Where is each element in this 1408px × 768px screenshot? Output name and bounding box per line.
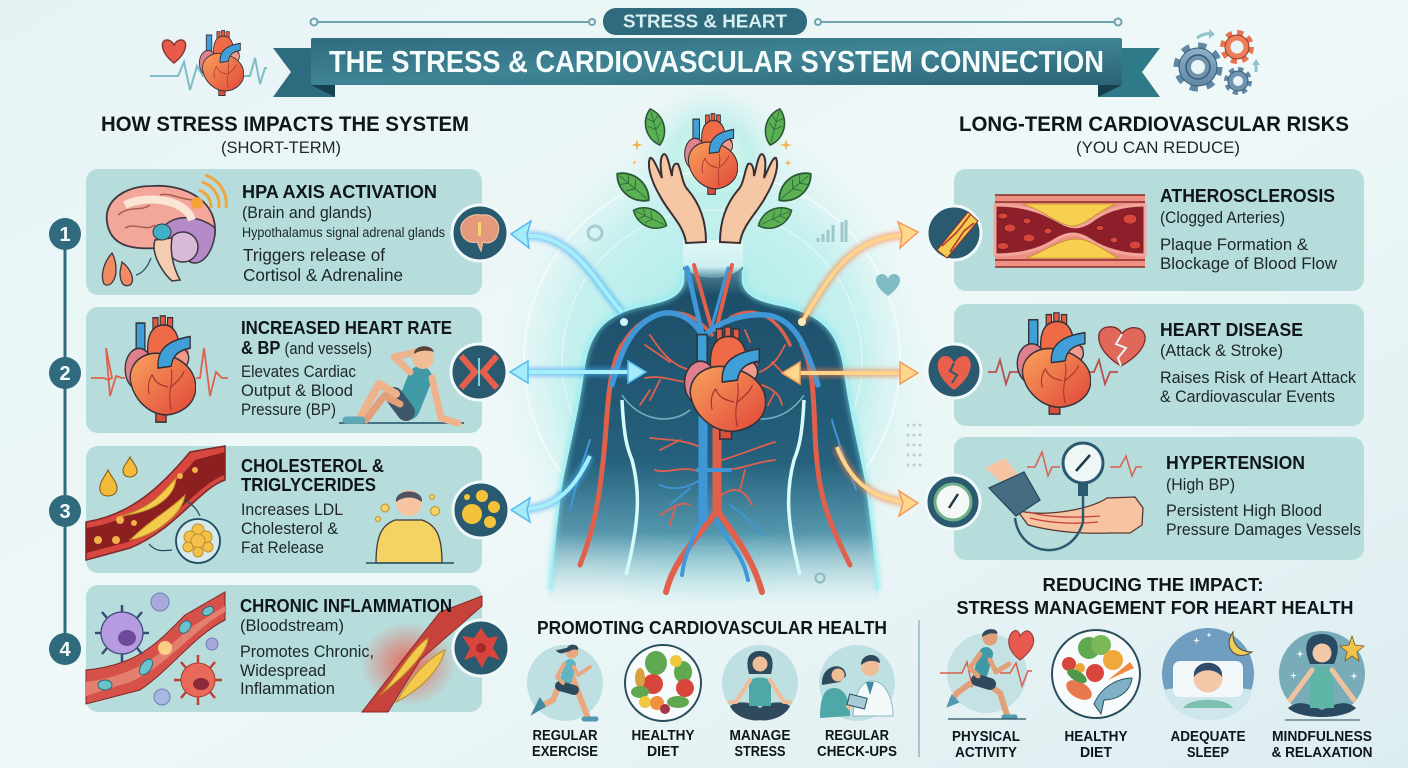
icon: resting man xyxy=(339,346,464,423)
text: Output & Blood xyxy=(241,382,353,400)
right section heading: (YOU CAN REDUCE) xyxy=(1076,138,1240,157)
text: HEART DISEASE xyxy=(1160,319,1303,340)
timeline with numbered steps: 3 xyxy=(59,501,71,523)
label: ADEQUATE xyxy=(1170,729,1246,745)
text: Promotes Chronic, xyxy=(240,643,374,661)
text xyxy=(241,455,384,557)
icon: healthy diet plate xyxy=(625,645,701,721)
decorative connector with badge: STRESS & HEART xyxy=(623,12,787,32)
text xyxy=(241,317,452,419)
panel: atherosclerosis xyxy=(927,169,1364,291)
text: (Brain and glands) xyxy=(242,204,372,222)
text: Raises Risk of Heart Attack xyxy=(1160,369,1357,387)
icon: inflamed artery xyxy=(360,596,482,712)
label: ACTIVITY xyxy=(955,745,1017,761)
blue vessels xyxy=(570,268,856,580)
body outline glow xyxy=(550,270,878,590)
leaves and sparkles xyxy=(611,107,817,234)
left hand xyxy=(649,154,706,243)
torso silhouette xyxy=(548,245,880,605)
text xyxy=(242,181,445,285)
text: Increases LDL xyxy=(241,501,343,519)
text: (Bloodstream) xyxy=(240,617,344,635)
label: HEALTHY xyxy=(1064,729,1128,745)
right section heading: LONG-TERM CARDIOVASCULAR RISKS xyxy=(959,113,1349,136)
text: Cholesterol & xyxy=(241,520,338,538)
text: Pressure Damages Vessels xyxy=(1166,521,1361,539)
text: CHOLESTEROL & xyxy=(241,455,384,476)
text xyxy=(1166,452,1361,539)
icon: small brain badge xyxy=(452,205,508,261)
text: & Cardiovascular Events xyxy=(1160,388,1335,406)
icon: mindfulness and relaxation xyxy=(1279,631,1365,720)
label: CHECK-UPS xyxy=(817,744,897,760)
panel: HPA axis activation xyxy=(86,169,508,295)
heading xyxy=(956,574,1354,618)
label: & RELAXATION xyxy=(1272,745,1372,761)
section: reducing the impact xyxy=(940,574,1372,761)
icon: regular exercise xyxy=(527,645,603,721)
right hand xyxy=(720,154,777,243)
decorative connector with badge xyxy=(310,8,1122,35)
header: badge and banner xyxy=(150,8,1260,97)
label: DIET xyxy=(647,744,679,760)
text: Cortisol & Adrenaline xyxy=(243,265,403,285)
timeline with numbered steps xyxy=(49,218,81,665)
icon: artery with plaque xyxy=(86,446,225,563)
icon: hearts with ECG line xyxy=(150,31,267,95)
panel: hypertension xyxy=(926,437,1364,560)
icon: healthy diet xyxy=(1052,630,1140,718)
panel: heart disease xyxy=(927,304,1364,426)
red vessels xyxy=(580,265,850,592)
text: Fat Release xyxy=(241,539,324,557)
text xyxy=(240,595,452,698)
text: Widespread xyxy=(240,662,326,680)
icon: gauge badge xyxy=(926,475,980,529)
icon: physical activity xyxy=(940,629,1034,719)
label: PHYSICAL xyxy=(952,729,1020,745)
main heart xyxy=(685,327,766,439)
label: MINDFULNESS xyxy=(1272,729,1372,745)
floating heart xyxy=(685,114,738,194)
text: Persistent High Blood xyxy=(1166,502,1322,520)
panel: increased heart rate and BP xyxy=(86,307,507,433)
text: (Attack & Stroke) xyxy=(1160,342,1283,360)
text: Hypothalamus signal adrenal glands xyxy=(242,225,445,240)
label: EXERCISE xyxy=(532,744,598,760)
text: TRIGLYCERIDES xyxy=(241,474,376,495)
icon: blood vessel with cells xyxy=(86,592,225,705)
text: & BP (and vessels) xyxy=(241,337,372,358)
panel: cholesterol and triglycerides xyxy=(86,446,509,573)
left section heading: (SHORT-TERM) xyxy=(221,138,341,157)
decorative chart marks xyxy=(588,220,922,582)
timeline with numbered steps: 1 xyxy=(59,224,71,246)
text: Inflammation xyxy=(240,680,335,698)
icon: artery badge xyxy=(927,206,981,260)
arrows: body to long-term risk cards xyxy=(782,222,918,516)
title ribbon xyxy=(273,38,1160,97)
icon: adequate sleep xyxy=(1162,628,1254,720)
icon: clogged artery cross-section xyxy=(995,195,1145,267)
text: Plaque Formation & xyxy=(1160,236,1308,254)
text: ATHEROSCLEROSIS xyxy=(1160,185,1335,206)
icon: arm with blood pressure cuff xyxy=(985,443,1143,550)
title ribbon: THE STRESS & CARDIOVASCULAR SYSTEM CONNECTION xyxy=(329,45,1104,79)
panel: chronic inflammation xyxy=(86,585,509,712)
section: promoting cardiovascular health xyxy=(527,618,897,760)
text: Triggers release of xyxy=(243,245,385,265)
text xyxy=(1160,185,1337,273)
timeline with numbered steps: 4 xyxy=(59,639,71,661)
label: MANAGE xyxy=(730,728,791,744)
timeline with numbered steps: 2 xyxy=(59,363,71,385)
icon: heart and broken heart xyxy=(988,313,1145,414)
text: HPA AXIS ACTIVATION xyxy=(242,181,437,202)
neck highlight xyxy=(683,240,743,278)
icon: broken heart badge xyxy=(927,344,981,398)
central body figure xyxy=(499,84,929,620)
text: (High BP) xyxy=(1166,476,1235,494)
halo xyxy=(499,84,929,620)
icon: heart with ECG xyxy=(91,316,228,422)
label: STRESS xyxy=(734,744,786,760)
icon: gears xyxy=(1177,29,1260,92)
text: CHRONIC INFLAMMATION xyxy=(240,595,452,616)
label: REGULAR xyxy=(532,728,598,744)
label: DIET xyxy=(1080,745,1112,761)
heading: REDUCING THE IMPACT: xyxy=(1042,574,1264,595)
text xyxy=(1160,319,1357,406)
icon: manage stress meditation xyxy=(722,645,798,721)
text: HYPERTENSION xyxy=(1166,452,1305,473)
left section heading xyxy=(101,113,469,157)
left section heading: HOW STRESS IMPACTS THE SYSTEM xyxy=(101,113,469,136)
arrows: stress effects from the body to short-term cards xyxy=(510,221,646,522)
label: SLEEP xyxy=(1187,745,1229,761)
text: Blockage of Blood Flow xyxy=(1160,255,1337,273)
icon: person with body fat xyxy=(366,490,454,563)
section: promoting cardiovascular health: PROMOTING CARDIOVASCULAR HEALTH xyxy=(537,618,887,638)
icon: regular check-ups xyxy=(819,645,895,721)
icon: fat globules badge xyxy=(453,482,509,538)
hands holding heart xyxy=(611,107,817,243)
label: HEALTHY xyxy=(632,728,695,744)
icon: brain xyxy=(102,175,226,286)
text: INCREASED HEART RATE xyxy=(241,317,452,338)
icon: inflamed cell badge xyxy=(453,620,509,676)
icon: constricted vessel badge xyxy=(451,344,507,400)
text: (Clogged Arteries) xyxy=(1160,209,1285,227)
heading: STRESS MANAGEMENT FOR HEART HEALTH xyxy=(956,597,1354,618)
text: Elevates Cardiac xyxy=(241,363,356,381)
right section heading xyxy=(959,113,1349,157)
label: REGULAR xyxy=(825,728,889,744)
text: Pressure (BP) xyxy=(241,401,336,419)
